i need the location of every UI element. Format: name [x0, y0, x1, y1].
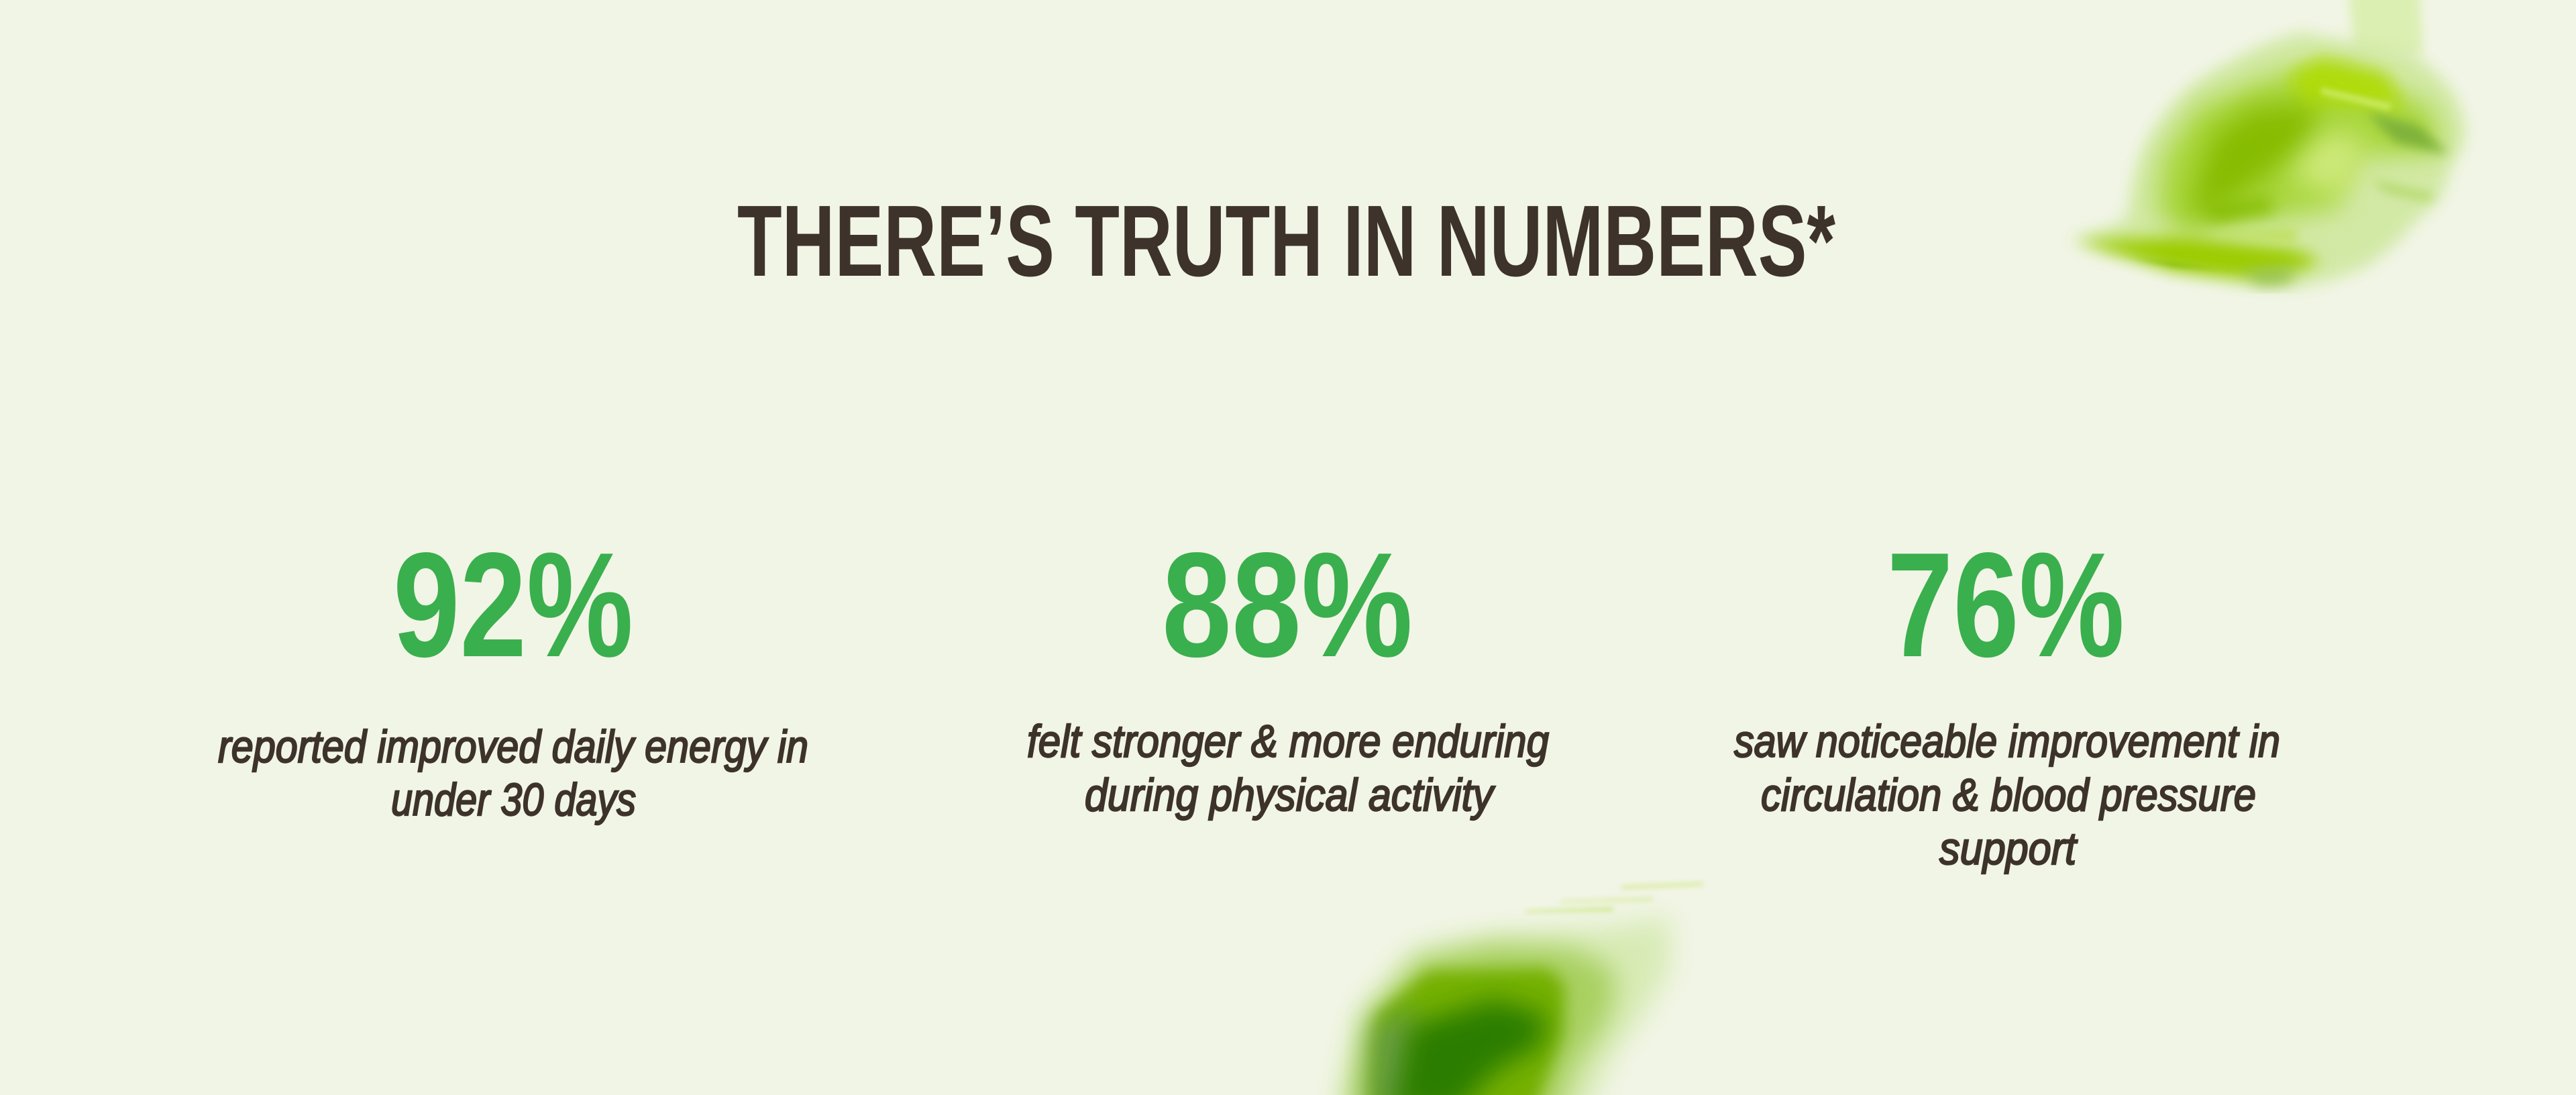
caption: circulation and blood pressure [1734, 716, 2280, 874]
caption: daily energy [218, 721, 808, 825]
caption: strength and endurance [1027, 716, 1549, 821]
icon: blurred leaf bottom centre [1335, 882, 1703, 1095]
number: 92%: 92% [393, 522, 633, 688]
caption: strength and endurance: during physical activity [1085, 770, 1496, 821]
stat: 88% [1027, 522, 1549, 821]
caption: circulation and blood pressure: circulation & blood pressure [1761, 770, 2256, 821]
number: 88%: 88% [1162, 522, 1413, 688]
caption: daily energy: reported improved daily energy in [218, 721, 808, 772]
icon: blurred leaf top right [2068, 0, 2465, 287]
caption: circulation and blood pressure: support [1939, 823, 2078, 874]
stat: 76% [1734, 522, 2280, 874]
stat: 92% [218, 522, 808, 825]
caption: circulation and blood pressure: saw noticeable improvement in [1734, 716, 2280, 767]
caption: strength and endurance: felt stronger & more enduring [1027, 716, 1549, 767]
title: THERE’S TRUTH IN NUMBERS* [737, 184, 1835, 297]
number: 76%: 76% [1887, 522, 2125, 688]
caption: daily energy: under 30 days [391, 774, 636, 825]
